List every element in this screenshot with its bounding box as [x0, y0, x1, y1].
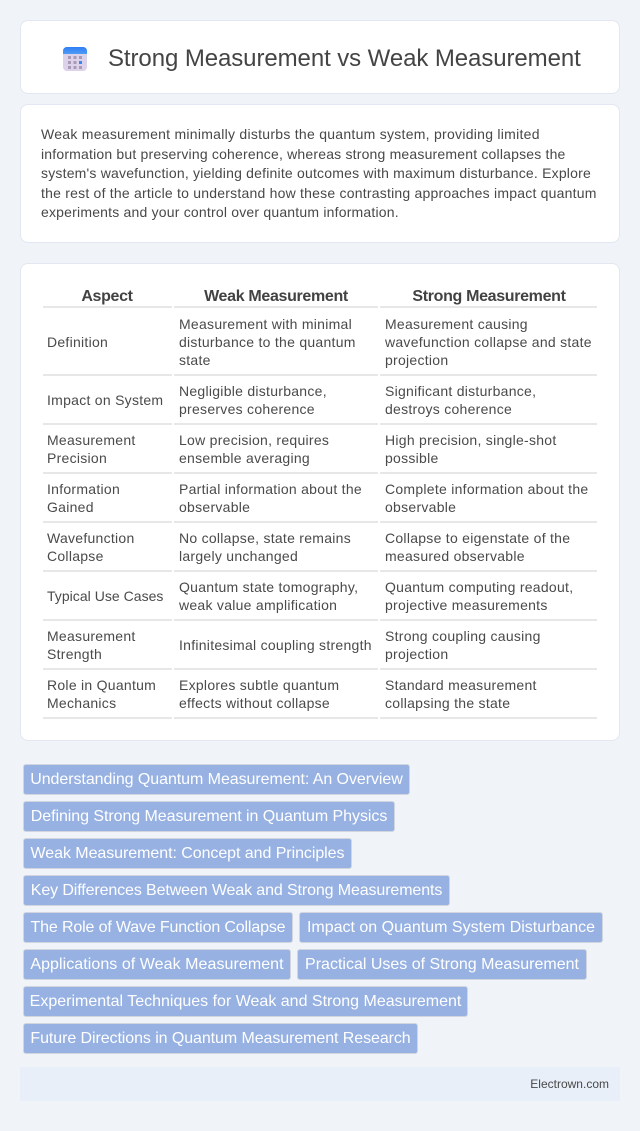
table header: Weak Measurement: [204, 288, 348, 305]
footer: [20, 1067, 620, 1101]
row: definition: disturbance to the quantum: [179, 334, 356, 350]
row: impact: Impact on System: [47, 392, 163, 408]
row: definition: Measurement with minimal: [179, 316, 352, 332]
tag: [23, 986, 468, 1017]
tag: Future Directions in Quantum Measurement Research: [30, 1030, 411, 1047]
text block: intro: the rest of the article to understand how these contrasting approaches impact quantum: [41, 185, 597, 201]
row: definition: Definition: [47, 334, 108, 350]
comparison table: [43, 288, 597, 719]
tag: [299, 912, 603, 943]
topic tags: [23, 764, 603, 1054]
tag: Defining Strong Measurement in Quantum Physics: [31, 808, 387, 825]
row: definition: Measurement causing: [385, 316, 528, 332]
row: role: effects without collapse: [179, 695, 330, 711]
text block: intro: [41, 126, 597, 220]
text block: intro: information but preserving coherence, whereas strong measurement collapses the: [41, 146, 566, 162]
row: impact: destroys coherence: [385, 401, 512, 417]
row: use cases: Quantum computing readout,: [385, 579, 573, 595]
row: information: [43, 481, 597, 523]
title: Strong Measurement vs Weak Measurement: [108, 45, 581, 72]
tag: [297, 949, 587, 980]
tag: Weak Measurement: Concept and Principles: [31, 845, 344, 862]
row: precision: possible: [385, 450, 439, 466]
tag: Key Differences Between Weak and Strong Measurements: [31, 882, 442, 899]
row: definition: wavefunction collapse and state: [385, 334, 592, 350]
row: collapse: measured observable: [385, 548, 525, 564]
tag: Impact on Quantum System Disturbance: [307, 919, 595, 936]
tag: [23, 764, 410, 795]
row: strength: Strength: [47, 646, 102, 662]
row: definition: projection: [385, 352, 448, 368]
table header: Aspect: [81, 288, 133, 305]
row: impact: preserves coherence: [179, 401, 315, 417]
tag: [23, 801, 395, 832]
text block: intro: Weak measurement minimally disturbs the quantum system, providing limited: [41, 126, 540, 142]
row: impact: Negligible disturbance,: [179, 383, 327, 399]
row: use cases: [43, 579, 597, 621]
row: use cases: Quantum state tomography,: [179, 579, 358, 595]
row: role: [43, 677, 597, 719]
row: strength: projection: [385, 646, 448, 662]
tag: [23, 949, 291, 980]
row: collapse: [43, 530, 597, 572]
row: strength: Measurement: [47, 628, 136, 644]
row: collapse: Collapse: [47, 548, 104, 564]
row: impact: Significant disturbance,: [385, 383, 536, 399]
row: information: Partial information about the: [179, 481, 362, 497]
row: strength: Strong coupling causing: [385, 628, 541, 644]
panel: comparison table: [20, 263, 620, 741]
row: collapse: Collapse to eigenstate of the: [385, 530, 570, 546]
tag: [23, 875, 450, 906]
row: precision: [43, 432, 597, 474]
row: information: Complete information about the: [385, 481, 588, 497]
tag: Applications of Weak Measurement: [30, 956, 284, 973]
row: definition: state: [179, 352, 211, 368]
row: strength: Infinitesimal coupling strength: [179, 637, 372, 653]
row: role: Mechanics: [47, 695, 116, 711]
text block: intro: system's wavefunction, yielding definite outcomes with maximum disturbance. Explore: [41, 165, 591, 181]
row: information: observable: [385, 499, 456, 515]
row: role: collapsing the state: [385, 695, 510, 711]
row: precision: Low precision, requires: [179, 432, 329, 448]
row: collapse: Wavefunction: [47, 530, 135, 546]
row: precision: High precision, single-shot: [385, 432, 556, 448]
tag: [23, 1023, 418, 1054]
row: use cases: projective measurements: [385, 597, 548, 613]
tag: The Role of Wave Function Collapse: [31, 919, 285, 936]
panel: header: [20, 20, 620, 94]
text block: intro: experiments and your control over quantum information.: [41, 204, 399, 220]
table header: [43, 288, 597, 308]
row: role: Role in Quantum: [47, 677, 156, 693]
panel: intro text: [20, 104, 620, 243]
row: use cases: Typical Use Cases: [47, 588, 163, 604]
row: impact: [43, 383, 597, 425]
row: collapse: largely unchanged: [179, 548, 298, 564]
tag: Experimental Techniques for Weak and Strong Measurement: [30, 993, 461, 1010]
row: precision: ensemble averaging: [179, 450, 310, 466]
tag: [23, 912, 293, 943]
tag: [23, 838, 352, 869]
row: information: Information: [47, 481, 120, 497]
table header: Strong Measurement: [412, 288, 566, 305]
footer credit: Electrown.com: [530, 1077, 609, 1091]
row: definition: [43, 316, 597, 376]
row: precision: Measurement: [47, 432, 136, 448]
tag: Practical Uses of Strong Measurement: [305, 956, 579, 973]
row: information: observable: [179, 499, 250, 515]
row: use cases: weak value amplification: [179, 597, 337, 613]
tag: Understanding Quantum Measurement: An Overview: [30, 771, 403, 788]
row: precision: Precision: [47, 450, 107, 466]
row: role: Explores subtle quantum: [179, 677, 339, 693]
row: collapse: No collapse, state remains: [179, 530, 351, 546]
row: role: Standard measurement: [385, 677, 537, 693]
row: information: Gained: [47, 499, 94, 515]
icon: calendar: [63, 47, 87, 71]
row: strength: [43, 628, 597, 670]
